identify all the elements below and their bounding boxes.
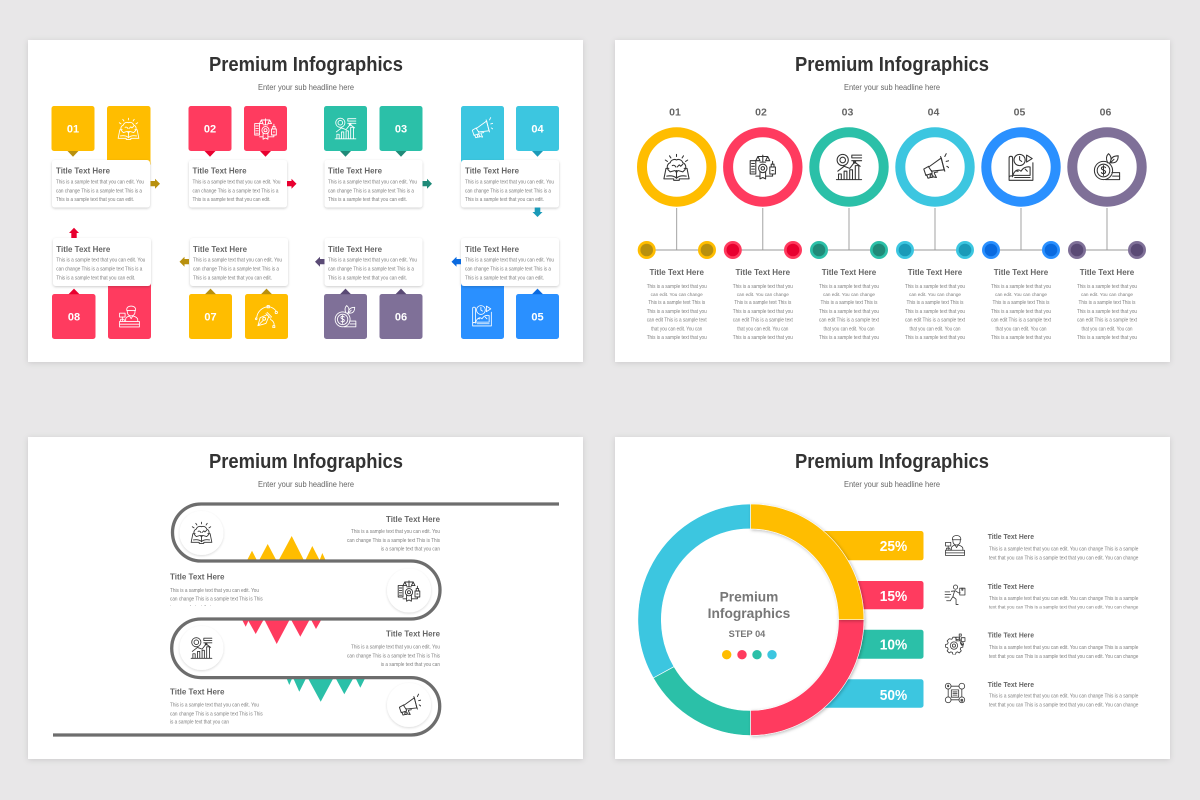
text block: left lower: can change This is a sample text This is This xyxy=(170,711,263,717)
yellow peaks xyxy=(247,536,326,561)
row 3: icon and text: text that you can This is a sample text that you can edit. You can change xyxy=(989,654,1138,660)
step 02: can change This is a sample text This is a xyxy=(192,188,278,194)
panel heading: Premium Infographics xyxy=(795,450,989,473)
step 07: This is a sample text that you can edit. xyxy=(193,275,272,281)
step 03: Title Text Here xyxy=(328,166,382,176)
step 06: 06 xyxy=(395,312,407,324)
step 06: This is a sample text that you can edit. You xyxy=(328,258,417,264)
step 06: This is a sample text that you can edit. xyxy=(328,275,407,281)
step 05 xyxy=(461,238,559,339)
column 05 xyxy=(982,106,1060,341)
icon: chart badge xyxy=(180,626,224,670)
step 01: 01 xyxy=(67,124,79,136)
text block: right lower: can change This is a sample text This is This xyxy=(347,653,440,659)
row 3: icon and text: Title Text Here xyxy=(988,630,1034,640)
step 05: This is a sample text that you can edit. You xyxy=(465,258,554,264)
arrow: 06 to 07 xyxy=(315,257,324,267)
row 4: icon and text xyxy=(945,680,1138,709)
text block: right top: This is a sample text that you can edit. You xyxy=(351,529,440,535)
arrow: 04 to 05 xyxy=(532,208,542,217)
column 06: can edit. You can change xyxy=(1081,292,1134,297)
arrow: 01 to 02 xyxy=(150,179,160,189)
column 01: This is a sample text that you xyxy=(647,309,707,315)
column 06: Title Text Here xyxy=(1080,267,1134,277)
step 05: can change This is a sample text This is a xyxy=(465,267,551,273)
donut chart xyxy=(638,504,864,736)
column 03: This is a sample text that you xyxy=(819,284,879,290)
bar: 15%: 15% xyxy=(880,589,907,605)
column 06: can edit This is a sample text xyxy=(1077,318,1137,324)
red inverted peaks xyxy=(242,619,322,644)
column 04: This is a sample text that you xyxy=(905,309,965,315)
step 04: can change This is a sample text This is a xyxy=(465,188,551,194)
text block: left upper: can change This is a sample text This is This xyxy=(170,597,263,603)
row 2: icon and text: text that you can This is a sample text that you can edit. You can change xyxy=(989,604,1139,610)
column 02: 02 xyxy=(755,106,767,118)
step 02: 02 xyxy=(204,124,216,136)
column 02: This is a sample text This is xyxy=(734,300,792,306)
text block: left lower: This is a sample text that you can edit. You xyxy=(170,703,259,709)
text block: right top: can change This is a sample text This is This xyxy=(347,538,440,544)
step 02 xyxy=(188,106,287,208)
column 01: This is a sample text that you xyxy=(647,335,707,341)
column 01: can edit This is a sample text xyxy=(647,318,707,324)
column 03: 03 xyxy=(842,106,853,118)
arrow: 03 to 04 xyxy=(422,179,432,189)
legend dots xyxy=(722,650,777,659)
teal inverted peaks xyxy=(286,677,366,702)
step 01: This is a sample text that you can edit. You xyxy=(56,180,144,186)
step 08: Title Text Here xyxy=(56,244,110,254)
bar: 10% xyxy=(845,630,924,659)
step 01: can change This is a sample text This is a xyxy=(56,188,142,194)
text block: left lower: is a sample text that you can xyxy=(170,720,229,726)
donut center text: Infographics xyxy=(708,605,791,621)
column 02: Title Text Here xyxy=(736,267,790,277)
panel heading: Premium Infographics xyxy=(795,53,989,76)
column 04: can edit. You can change xyxy=(909,292,962,297)
column 01: Title Text Here xyxy=(649,267,704,277)
donut center text: Premium xyxy=(720,588,778,604)
step 06: Title Text Here xyxy=(328,244,382,254)
column 02: This is a sample text that you xyxy=(733,309,793,315)
bar: 15% xyxy=(845,581,924,609)
row 2: icon and text xyxy=(945,582,1139,610)
row 1: icon and text xyxy=(946,532,1138,561)
column 06: This is a sample text This is xyxy=(1078,300,1136,306)
column 04: This is a sample text that you xyxy=(905,284,965,290)
donut center text: STEP 04 xyxy=(729,629,765,639)
row 1: icon and text: This is a sample text that you can edit. You can change This is a sample xyxy=(989,546,1138,552)
panel sub headline: Enter your sub headline here xyxy=(258,479,354,489)
row 4: icon and text: This is a sample text that you can edit. You can change This is a sample xyxy=(989,694,1138,700)
step 08: This is a sample text that you can edit. You xyxy=(56,258,145,264)
step 07 xyxy=(189,238,288,339)
column 03: This is a sample text that you xyxy=(819,335,879,341)
text block: right top xyxy=(347,514,440,553)
step 04: This is a sample text that you can edit. xyxy=(465,197,544,203)
bar: 50% xyxy=(820,679,924,708)
text block: right top: Title Text Here xyxy=(386,514,440,524)
step 03 xyxy=(324,106,422,208)
row 4: icon and text: text that you can This is a sample text that you can edit. You can change xyxy=(989,703,1138,709)
step 03: This is a sample text that you can edit. xyxy=(328,197,407,203)
row 1: icon and text: Title Text Here xyxy=(988,532,1034,541)
step 07: This is a sample text that you can edit. You xyxy=(193,258,282,264)
column 02: This is a sample text that you xyxy=(733,284,793,290)
step 07: 07 xyxy=(204,312,217,324)
step 04: This is a sample text that you can edit. You xyxy=(465,180,554,186)
bar: 25%: 25% xyxy=(880,539,907,555)
column 05: 05 xyxy=(1014,106,1025,118)
row 4: icon and text: Title Text Here xyxy=(988,680,1034,689)
text block: left upper: This is a sample text that you can edit. You xyxy=(170,588,259,594)
panel heading: Premium Infographics xyxy=(209,450,403,473)
column 06: This is a sample text that you xyxy=(1077,335,1137,341)
column 02: that you can edit. You can xyxy=(737,326,788,332)
bar: 10%: 10% xyxy=(880,638,907,654)
column 05: that you can edit. You can xyxy=(996,326,1046,332)
arrow: 05 to 06 xyxy=(452,257,461,267)
icon: megaphone badge xyxy=(387,683,431,727)
step 08: This is a sample text that you can edit. xyxy=(56,275,135,281)
column 04: 04 xyxy=(928,106,939,118)
column 06: This is a sample text that you xyxy=(1077,284,1137,290)
column 01: can edit. You can change xyxy=(651,292,703,297)
text block: left lower xyxy=(170,687,263,726)
step 07: can change This is a sample text This is a xyxy=(193,267,279,273)
column 03: that you can edit. You can xyxy=(824,326,874,332)
icon: law badge xyxy=(387,568,431,612)
arrow: 02 to 03 xyxy=(287,179,296,189)
panel sub headline: Enter your sub headline here xyxy=(844,82,940,92)
row 3: icon and text xyxy=(946,630,1138,660)
step 05: 05 xyxy=(531,312,544,324)
arrow: 07 to 08 xyxy=(180,257,189,267)
step 03: This is a sample text that you can edit. You xyxy=(328,180,417,186)
column 01: This is a sample text that you xyxy=(647,284,707,290)
step 02: This is a sample text that you can edit. You xyxy=(192,180,280,186)
text block: right lower: is a sample text that you can xyxy=(381,662,440,668)
step 08: 08 xyxy=(68,312,80,324)
column 03: can edit This is a sample text xyxy=(819,318,879,324)
step 01 xyxy=(52,106,150,208)
step 06: can change This is a sample text This is a xyxy=(328,267,414,273)
text block: right lower xyxy=(347,628,440,668)
column 05: Title Text Here xyxy=(994,267,1048,277)
step 02: Title Text Here xyxy=(192,166,247,176)
row 2: icon and text: This is a sample text that you can edit. You can change This is a sample xyxy=(989,596,1138,602)
text block: right lower: Title Text Here xyxy=(386,628,440,638)
step 01: Title Text Here xyxy=(56,166,110,176)
text block: left upper: Title Text Here xyxy=(170,572,225,582)
column 01: 01 xyxy=(669,106,681,118)
step 04 xyxy=(461,106,559,208)
panel heading: Premium Infographics xyxy=(209,53,403,76)
column 03: This is a sample text that you xyxy=(819,309,879,315)
column 03: can edit. You can change xyxy=(823,292,876,297)
column 05: This is a sample text that you xyxy=(991,309,1051,315)
step 05: This is a sample text that you can edit. xyxy=(465,275,544,281)
step 05: Title Text Here xyxy=(465,244,519,254)
column 04: Title Text Here xyxy=(908,267,962,277)
column 05: can edit. You can change xyxy=(995,292,1048,297)
donut center text xyxy=(708,588,791,639)
column 02 xyxy=(724,106,802,341)
panel sub headline: Enter your sub headline here xyxy=(844,479,940,489)
row 1: icon and text: text that you can This is a sample text that you can edit. You can change xyxy=(989,555,1138,561)
column 01 xyxy=(638,106,716,341)
step 06 xyxy=(324,238,422,339)
column 03: This is a sample text This is xyxy=(820,300,878,306)
column 03 xyxy=(810,106,888,341)
column 01: that you can edit. You can xyxy=(651,326,702,332)
serpentine road line xyxy=(53,504,559,735)
column 05: This is a sample text that you xyxy=(991,335,1051,341)
column 04: This is a sample text This is xyxy=(906,300,964,306)
bar: 50%: 50% xyxy=(880,688,907,704)
text block: right top: is a sample text that you can xyxy=(381,547,440,553)
column 06: 06 xyxy=(1100,106,1111,118)
column 05: This is a sample text This is xyxy=(992,300,1050,306)
column 06 xyxy=(1068,106,1146,341)
step 07: Title Text Here xyxy=(193,244,247,254)
step 04: Title Text Here xyxy=(465,166,519,176)
column 02: can edit. You can change xyxy=(737,292,789,297)
row 2: icon and text: Title Text Here xyxy=(988,582,1034,591)
step 08 xyxy=(52,238,151,339)
arrow: 08 to 01 xyxy=(69,228,79,238)
step 01: This is a sample text that you can edit. xyxy=(56,197,134,203)
column 03: Title Text Here xyxy=(822,267,876,277)
step 03: can change This is a sample text This is a xyxy=(328,188,414,194)
step 08: can change This is a sample text This is a xyxy=(56,267,142,273)
text block: right lower: This is a sample text that you can edit. You xyxy=(351,644,440,650)
column 04: that you can edit. You can xyxy=(910,326,960,332)
icon: book badge xyxy=(180,511,224,555)
column 01: This is a sample text This is xyxy=(648,300,705,306)
column 06: This is a sample text that you xyxy=(1077,309,1137,315)
column 05: can edit This is a sample text xyxy=(991,318,1051,324)
panel: process cards xyxy=(28,40,583,362)
text block: left upper: is a sample text that you can xyxy=(170,605,229,611)
column 05: This is a sample text that you xyxy=(991,284,1051,290)
step 02: This is a sample text that you can edit. xyxy=(192,197,270,203)
column 04: can edit This is a sample text xyxy=(905,318,965,324)
panel: ring timeline xyxy=(615,40,1170,362)
column 06: that you can edit. You can xyxy=(1082,326,1132,332)
row 3: icon and text: This is a sample text that you can edit. You can change This is a sample xyxy=(989,645,1138,651)
text block: left upper xyxy=(170,574,262,606)
panel sub headline: Enter your sub headline here xyxy=(258,82,354,92)
column 04: This is a sample text that you xyxy=(905,335,965,341)
panel: serpentine road xyxy=(28,437,583,759)
step 04: 04 xyxy=(531,124,544,136)
column 04 xyxy=(896,106,974,341)
step 03: 03 xyxy=(395,124,407,136)
panel: donut chart xyxy=(615,437,1170,759)
bar: 25% xyxy=(820,531,924,560)
column 02: can edit This is a sample text xyxy=(733,318,793,324)
text block: left lower: Title Text Here xyxy=(170,687,225,697)
column 02: This is a sample text that you xyxy=(733,335,793,341)
